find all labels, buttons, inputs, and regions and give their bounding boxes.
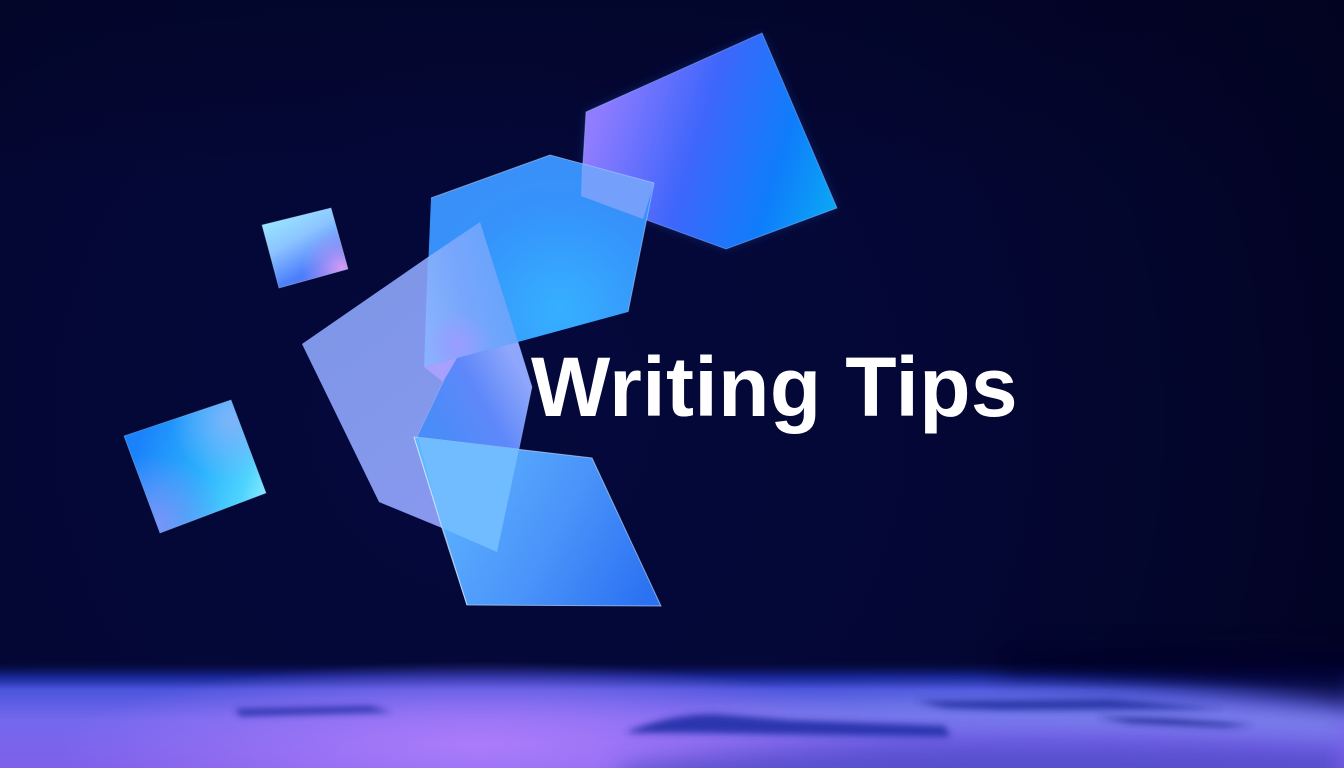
shape: pale frosted polygon: [302, 257, 480, 528]
shape: overlap of hexagon and pentagon: [581, 164, 654, 219]
shadow: left: [235, 706, 392, 716]
shadow: upper right: [915, 699, 1225, 710]
shape: tall overlap, lower part: [418, 437, 519, 552]
shape: lower translucent panel: [417, 342, 532, 449]
title: Writing Tips: [531, 340, 1018, 434]
hexagon edge highlight: [431, 155, 654, 312]
shadow: lower right: [1095, 717, 1255, 727]
shape: left square: [124, 400, 266, 533]
shape: small square: [262, 208, 348, 288]
shape: tall overlap, upper part: [424, 222, 518, 367]
shape: hexagon: [424, 155, 654, 367]
parallelogram left edge highlight: [414, 437, 467, 605]
shape: bottom parallelogram: [414, 437, 661, 606]
shape: large pentagon top right: [581, 33, 837, 249]
floor with soft shadows: [0, 650, 1344, 768]
shape: purple glint in overlap: [424, 358, 457, 382]
floating shapes: [124, 33, 837, 606]
shadow: center: [625, 714, 950, 737]
